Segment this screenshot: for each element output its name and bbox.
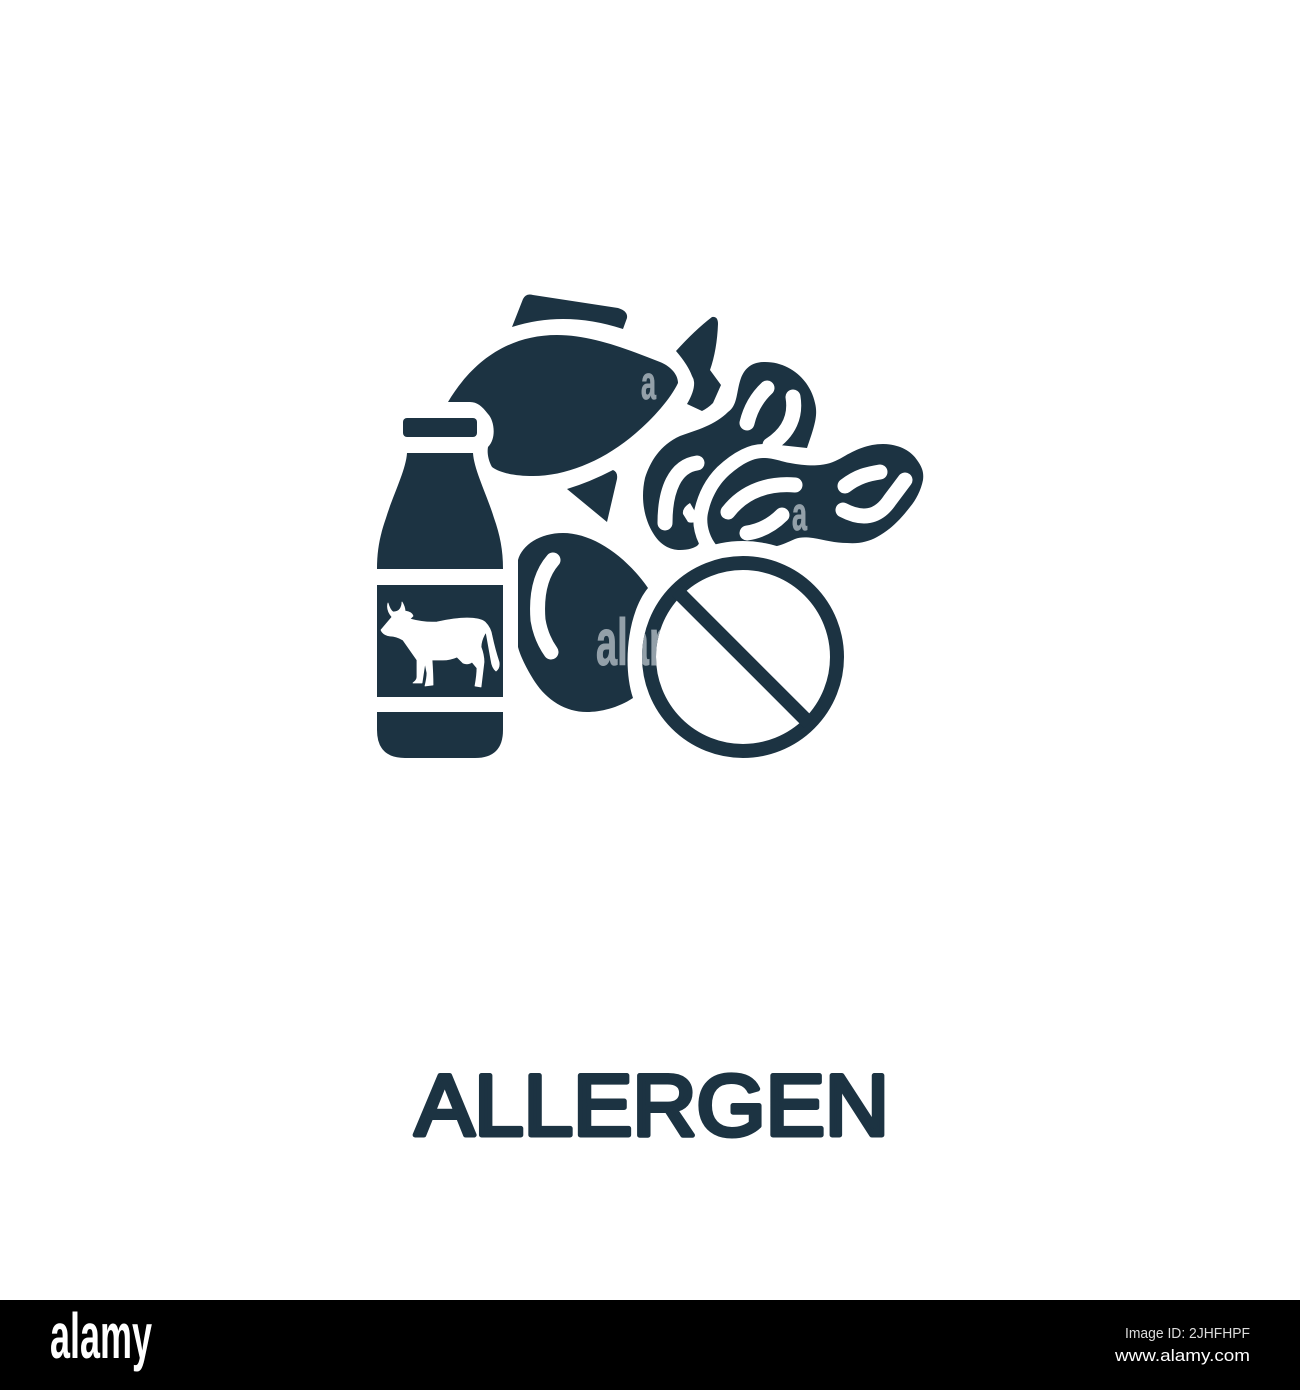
text: watermark letter on peanut: a <box>792 487 807 540</box>
icon: milk bottle <box>377 418 503 758</box>
icon: back peanut <box>643 362 816 550</box>
icon: prohibition sign <box>649 563 837 751</box>
title: ALLERGEN <box>415 1058 889 1154</box>
footer logo: alamy <box>50 1300 152 1372</box>
icon: egg <box>518 533 648 712</box>
bottle cap <box>403 418 477 437</box>
text: watermark letter on fish: a <box>641 356 656 409</box>
icon: front peanut <box>707 444 923 546</box>
bottle shoulder <box>377 453 503 569</box>
text: watermark across egg and sign: alamy <box>596 605 704 679</box>
footer image id: Image ID: 2JHFHPF <box>1125 1325 1250 1342</box>
icon: prohibition halo <box>627 541 859 773</box>
footer url: www.alamy.com <box>1114 1346 1250 1365</box>
bottle base <box>377 712 503 758</box>
icon: allergen foods with prohibition sign <box>377 294 923 773</box>
bottle label <box>377 585 503 697</box>
panel: footer bar <box>0 1300 1300 1390</box>
icon: fish <box>448 294 721 522</box>
icon: cow <box>381 602 499 687</box>
